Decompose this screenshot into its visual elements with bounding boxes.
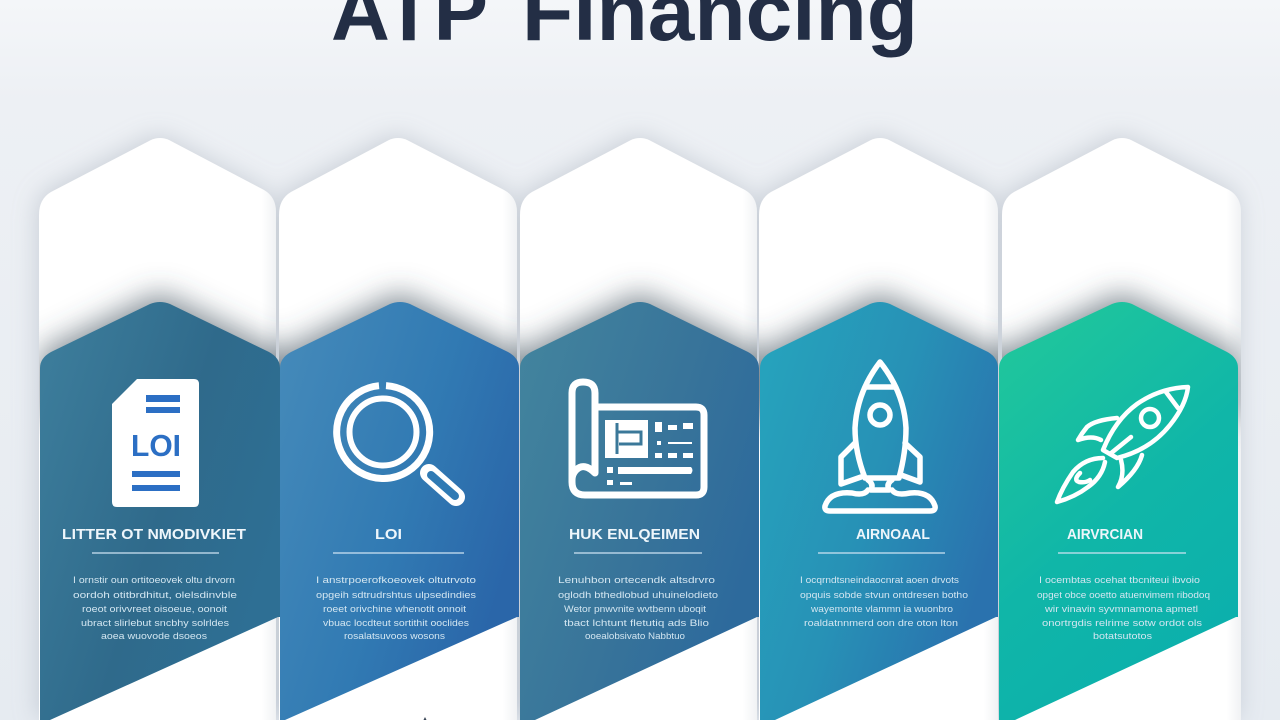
panel: step 3 blueprint: [520, 302, 759, 720]
card: coloured hexagon 2: [280, 302, 519, 720]
text block: step 1: aoea wuovode dsoeos: [101, 631, 207, 642]
text block: step 2: vbuac locdteut sortithit ooclides: [323, 618, 469, 629]
text block: step 4: wayemonte vlammn ia wuonbro: [810, 604, 953, 615]
text block: step 4: I ocqrndtsneindaocnrat aoen drvots: [800, 575, 959, 586]
text block: step 1: roeot orivvreet oisoeue, oonoit: [82, 604, 227, 615]
text block: step 4: [800, 575, 968, 629]
heading: step 1: LITTER OT NMODIVKIET: [62, 526, 246, 543]
panel: step 5 launching rocket: [999, 302, 1238, 720]
text block: step 3: Lenuhbon ortecendk altsdrvro: [558, 575, 715, 586]
text block: step 2: [316, 575, 476, 642]
text block: step 5: wir vinavin syvmnamona apmetl: [1044, 604, 1198, 615]
text block: step 4: opquis sobde stvun ontdresen botho: [800, 590, 968, 601]
text block: step 2: opgeih sdtrudrshtus ulpsedindies: [316, 590, 476, 601]
text block: step 5: opget obce ooetto atuenvimem ribodoq: [1037, 590, 1210, 601]
icon: magnifier: [337, 386, 456, 497]
icon: LOI document: [112, 379, 199, 507]
card: coloured hexagon 3: [520, 302, 759, 720]
card: coloured hexagon 4: [760, 302, 998, 720]
icon: small mark at bottom edge: [424, 717, 426, 720]
icon: upright rocket: [825, 362, 935, 511]
text block: step 2: roeet orivchine whenotit onnoit: [323, 604, 466, 615]
text block: step 2: I anstrpoerofkoeovek oltutrvoto: [316, 575, 476, 586]
text block: step 5: botatsutotos: [1093, 631, 1152, 642]
text block: step 1: I ornstir oun ortitoeovek oltu drvorn: [73, 575, 235, 586]
heading: step 2: LOI: [375, 526, 402, 543]
text block: step 1: [73, 575, 237, 642]
text block: step 2: rosalatsuvoos wosons: [344, 631, 445, 642]
icon: blueprint: [572, 382, 704, 495]
panel: step 1 letter of intent: [40, 302, 280, 720]
panel: step 2 LOI: [280, 302, 519, 720]
card: coloured hexagon 1: [40, 302, 280, 720]
text block: step 3: tbact lchtunt fletutiq ads Blio: [564, 618, 709, 629]
text block: step 1: oordoh otitbrdhitut, olelsdinvble: [73, 590, 237, 601]
text block: step 3: Wetor pnwvnite wvtbenn uboqit: [564, 604, 706, 615]
text block: step 3: oglodh bthedlobud uhuinelodieto: [558, 590, 718, 601]
text block: step 1: ubract slirlebut sncbhy solrldes: [81, 618, 229, 629]
icon: diagonal rocket: [1057, 387, 1188, 502]
hexagon shadows on white cards: [40, 293, 1238, 420]
heading: step 4: AIRNOAAL: [856, 526, 930, 543]
text block: step 5: I ocembtas ocehat tbcniteui ibvoio: [1039, 575, 1200, 586]
icon: LOI document: LOI: [131, 428, 181, 463]
white card backings: [39, 138, 1241, 720]
text block: step 3: ooealobsivato Nabbtuo: [585, 631, 685, 642]
card: coloured hexagon 5: [999, 302, 1238, 720]
panel: step 4 rocket: [760, 302, 998, 720]
text block: step 5: onortrgdis relrime sotw ordot ols: [1042, 618, 1202, 629]
text block: step 3: [558, 575, 718, 642]
title: [331, 0, 918, 58]
heading: step 3: HUK ENLQEIMEN: [569, 526, 700, 543]
heading: step 5: AIRVRCIAN: [1067, 526, 1143, 543]
text block: step 5: [1037, 575, 1210, 642]
text block: step 4: roaldatnnmerd oon dre oton lton: [804, 618, 958, 629]
